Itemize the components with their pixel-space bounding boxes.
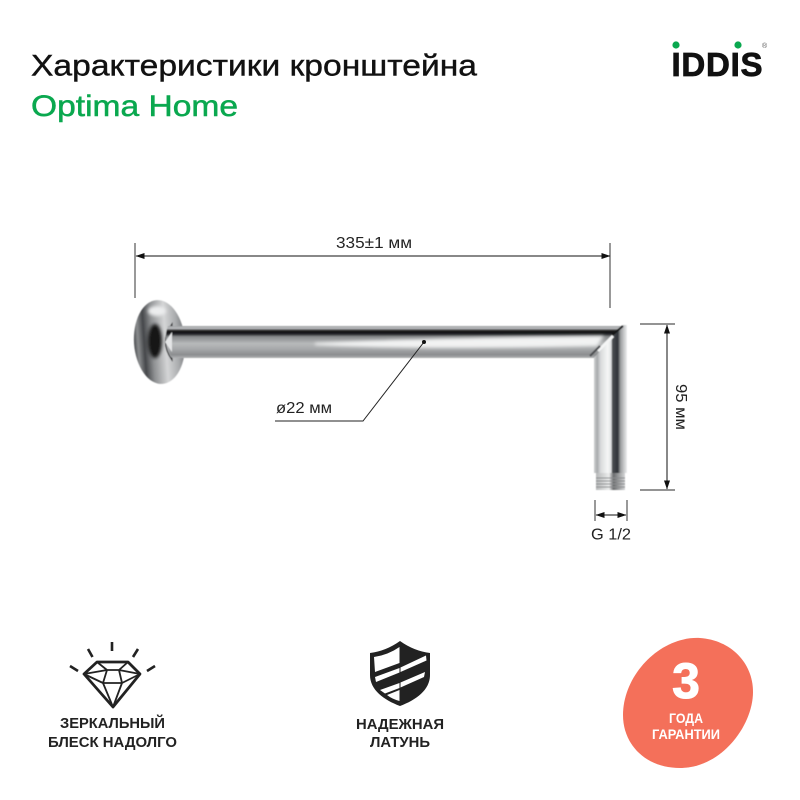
dimension: 335±1 мм: 335±1 мм xyxy=(336,235,412,252)
badge: 3 years warranty: ГОДА xyxy=(669,710,703,726)
feature: reliable brass: ЛАТУНЬ xyxy=(370,735,430,751)
flange xyxy=(131,298,188,386)
badge: 3 years warranty xyxy=(623,638,753,768)
feature: mirror shine: БЛЕСК НАДОЛГО xyxy=(48,735,177,751)
product image: shower arm xyxy=(131,298,627,490)
callout: diameter 22 mm xyxy=(275,340,426,421)
dimension: G 1/2 xyxy=(591,500,631,544)
callout: diameter 22 mm: ø22 мм xyxy=(276,400,332,417)
badge: 3 years warranty: 3 xyxy=(672,653,700,709)
logo: IDDIS: ® xyxy=(762,42,768,50)
thread xyxy=(596,473,625,490)
dimension: G 1/2: G 1/2 xyxy=(591,526,631,544)
label: НАДЕЖНАЯ xyxy=(356,717,444,733)
title: Optima Home xyxy=(31,90,238,123)
feature: reliable brass xyxy=(356,641,444,751)
badge: 3 years warranty: ГАРАНТИИ xyxy=(652,726,720,742)
logo: IDDIS: IDDIS xyxy=(672,46,762,83)
icon: diamond xyxy=(70,642,155,707)
label: ЗЕРКАЛЬНЫЙ xyxy=(60,714,165,732)
title xyxy=(31,50,477,123)
dimension: 95 мм xyxy=(640,324,689,490)
feature: mirror shine xyxy=(48,642,177,751)
title: Характеристики кронштейна xyxy=(31,50,477,82)
dimension: 95 мм: 95 мм xyxy=(672,384,689,430)
vertical tube xyxy=(594,325,627,473)
dimension: 335±1 мм xyxy=(135,235,610,308)
horizontal tube xyxy=(166,326,623,358)
icon: shield xyxy=(370,641,430,706)
